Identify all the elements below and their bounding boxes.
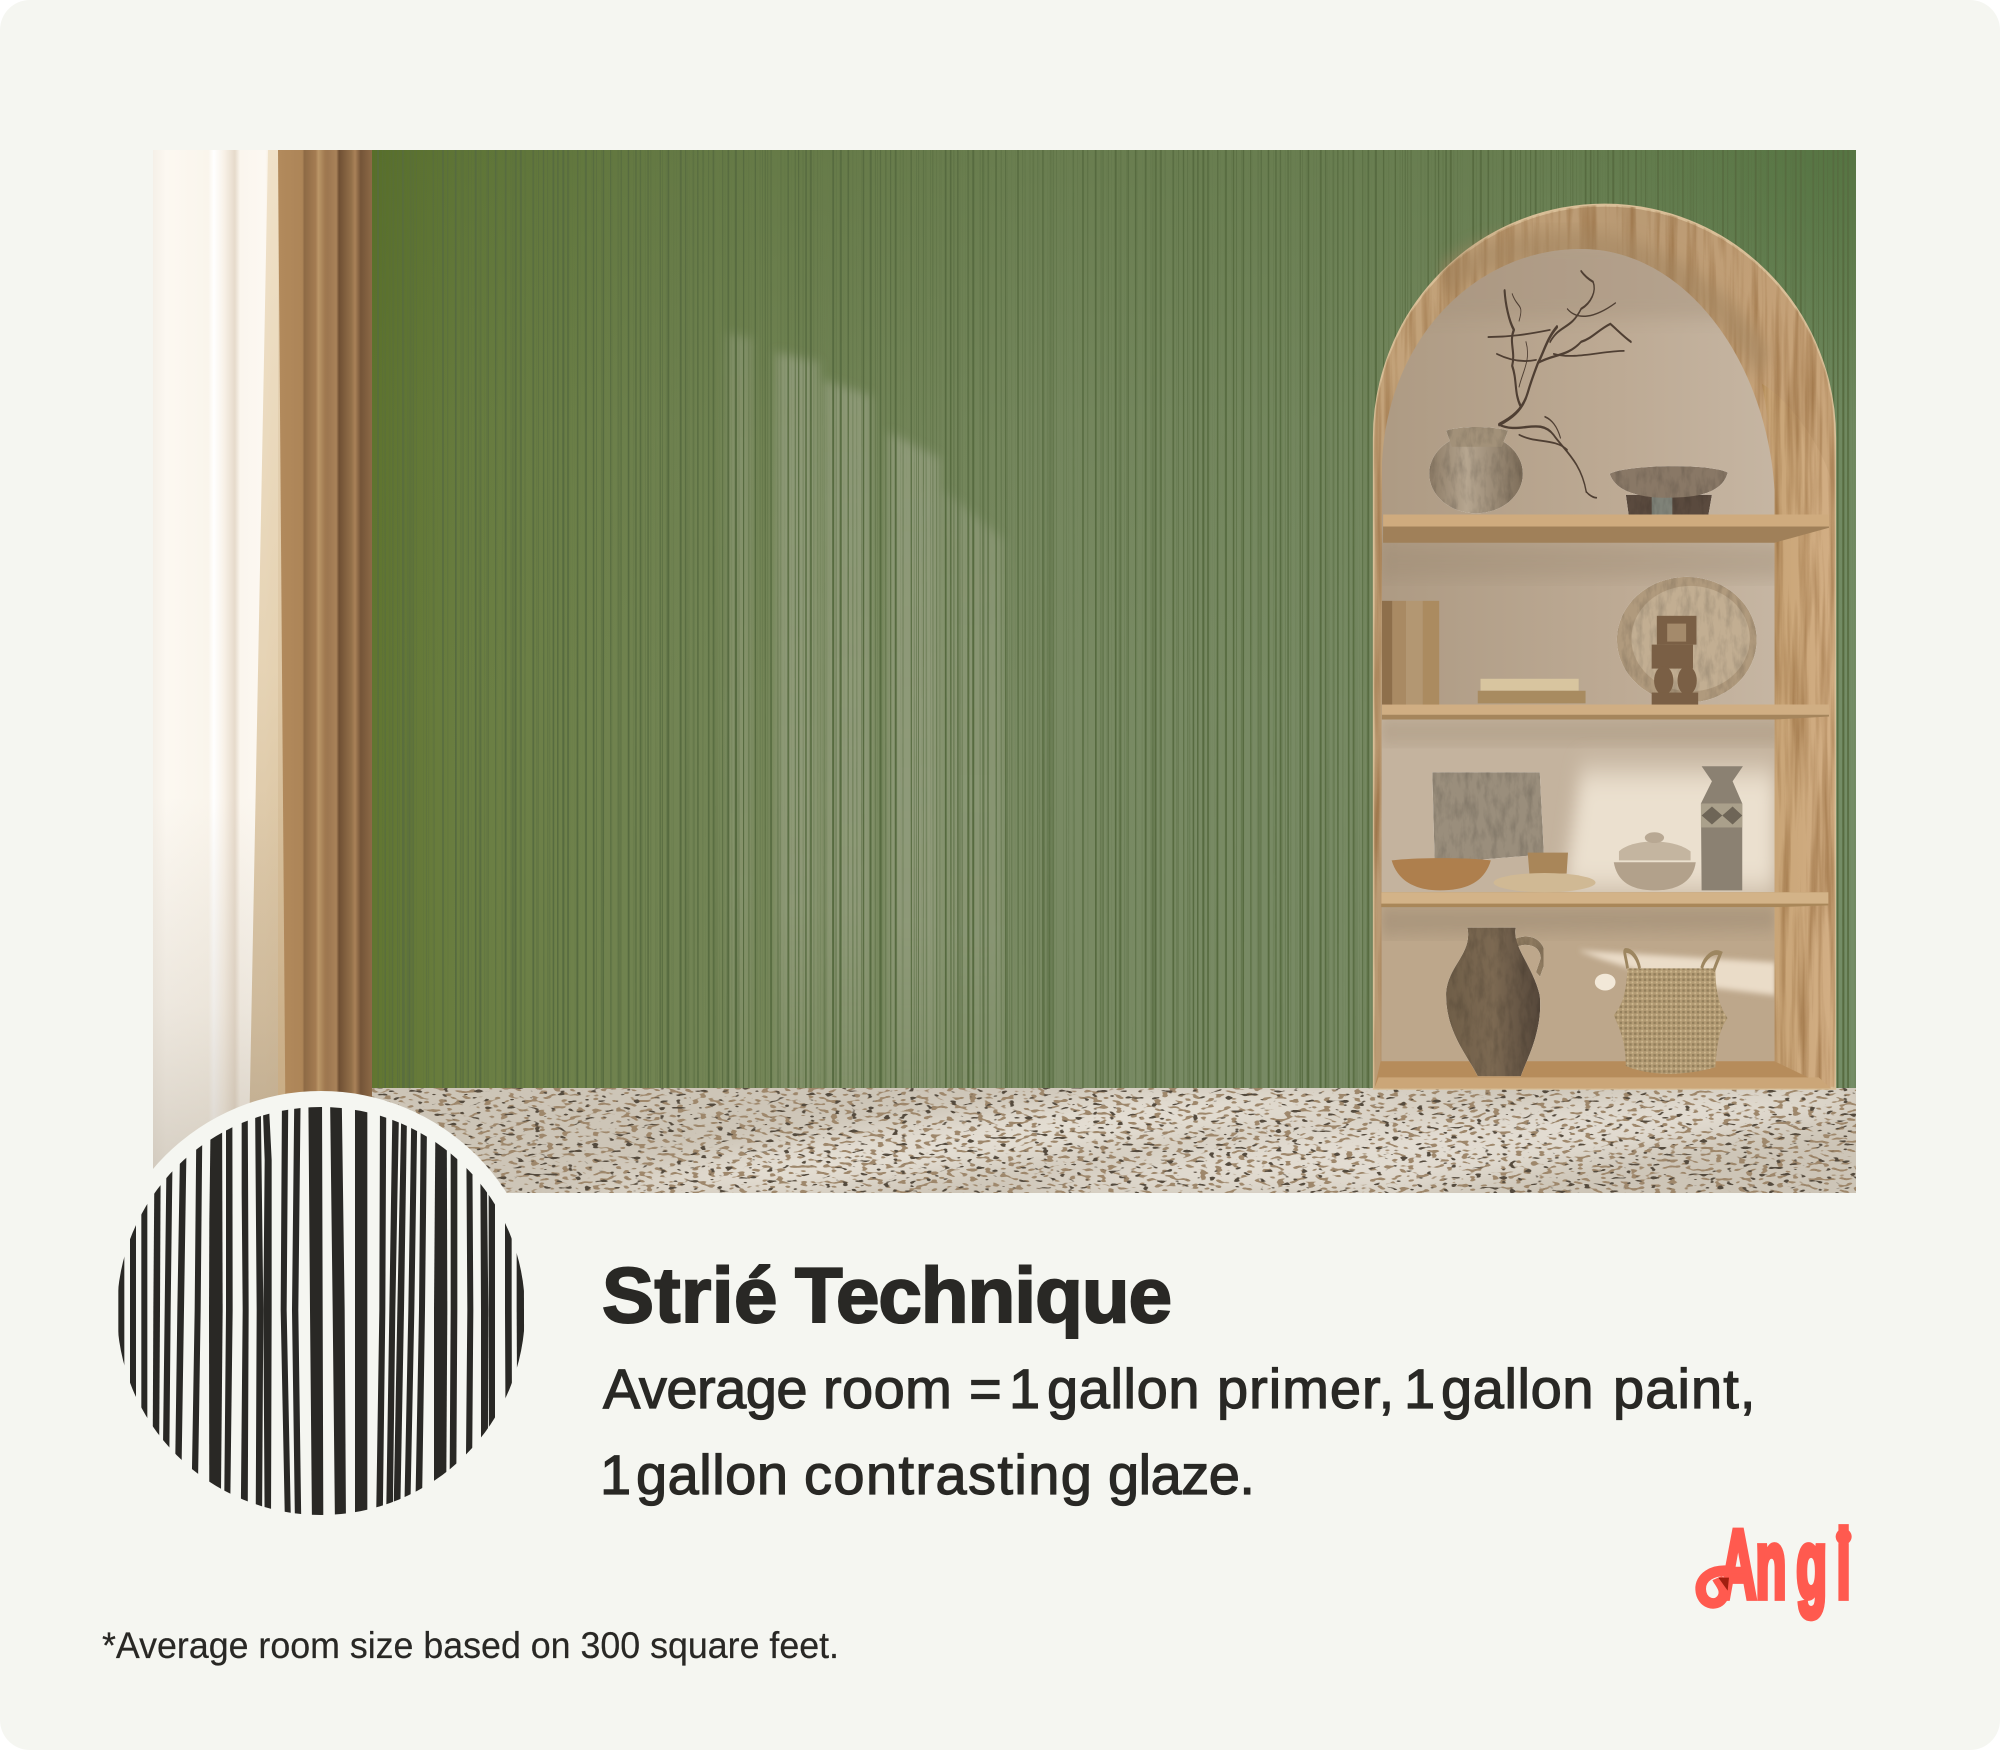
right inner panel [1762, 384, 1831, 1088]
lidded stone dish [1614, 832, 1696, 890]
body line 2: gallon [636, 1443, 805, 1506]
ring around stripe disc [101, 1091, 541, 1531]
logo fold [1718, 1578, 1729, 1591]
woven basket [1614, 950, 1727, 1074]
body line 1: = [969, 1357, 1017, 1420]
logo wordmark: Angi [1720, 1511, 1851, 1619]
arched bookcase [1374, 205, 1835, 1088]
body line 1: gallon [1047, 1357, 1216, 1420]
round clay vase [1429, 427, 1523, 513]
terrazzo floor [372, 1088, 1856, 1193]
body line 2: glaze. [1108, 1443, 1254, 1506]
title: Strié [602, 1251, 800, 1339]
body line 2: contrasting [804, 1443, 1110, 1506]
carved figure [1652, 616, 1698, 705]
footnote: *Average room size based on 300 square feet. [102, 1625, 839, 1666]
body text [600, 1357, 1757, 1506]
wooden plate [1617, 577, 1757, 703]
shelf 1 [1383, 515, 1829, 543]
arch frame [1374, 205, 1835, 1088]
stripe swatch disc [118, 1093, 524, 1527]
photo: room with strié wall [153, 150, 1856, 1193]
lighter tan fold behind the sheer [250, 150, 286, 1103]
round tray [1494, 873, 1596, 892]
bottom shelf [1374, 1061, 1831, 1088]
upright books [1382, 601, 1439, 705]
body line 1: room [823, 1357, 968, 1420]
shelf 3 [1381, 892, 1828, 907]
body line 1: paint, [1613, 1357, 1757, 1420]
shelf 2 [1382, 705, 1829, 720]
green strié wall [372, 150, 1856, 1130]
body line 1: 1 [1404, 1357, 1451, 1420]
body line 2: 1 [600, 1443, 647, 1506]
Angi logo [1701, 1511, 1852, 1619]
title: Technique [795, 1251, 1171, 1339]
wooden bowl [1392, 858, 1491, 890]
body line 1: primer, [1217, 1357, 1412, 1420]
clay jug [1446, 928, 1543, 1076]
back wall [1374, 240, 1781, 1079]
stacked books [1478, 679, 1586, 703]
tan curtain [278, 150, 372, 1193]
logo loop [1701, 1571, 1732, 1603]
sheer white curtain [153, 150, 268, 1118]
small cup [1528, 853, 1568, 874]
body line 1: Average [603, 1357, 822, 1420]
body line 1: 1 [1009, 1357, 1056, 1420]
curtains [153, 150, 372, 1193]
tall patterned vase [1701, 766, 1743, 890]
logo i-dot [1836, 1529, 1852, 1545]
dry branch [1488, 271, 1631, 498]
leaning slab [1432, 772, 1544, 863]
body line 1: gallon [1441, 1357, 1610, 1420]
stone pedestal bowl [1610, 466, 1728, 515]
curtain lower shading [153, 876, 278, 1169]
